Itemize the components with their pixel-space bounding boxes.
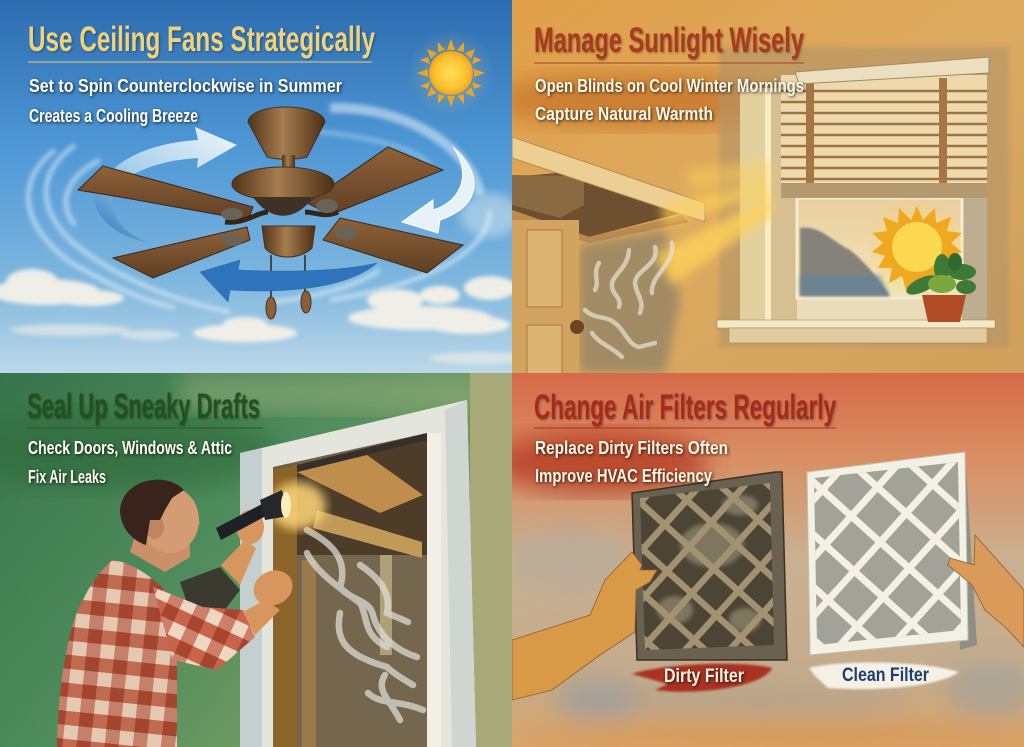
clouds bbox=[0, 269, 530, 364]
arrow: right white bbox=[402, 147, 474, 233]
text block: Check Doors, Windows & Attic bbox=[28, 438, 232, 458]
panel: air filters bbox=[490, 373, 1024, 747]
arrow: top curved bbox=[95, 127, 237, 243]
panel: ceiling fans bbox=[0, 0, 530, 373]
air wisps bbox=[585, 243, 672, 357]
door frame bbox=[240, 400, 476, 747]
label: dirty filter: Dirty Filter bbox=[664, 666, 744, 687]
label: clean filter bbox=[809, 662, 959, 689]
text block bbox=[29, 76, 342, 126]
text block bbox=[535, 438, 728, 486]
dirty filter bbox=[632, 472, 787, 660]
text block: Fix Air Leaks bbox=[28, 467, 106, 487]
text block: Capture Natural Warmth bbox=[535, 104, 713, 124]
ceiling opening bbox=[512, 137, 705, 243]
door bbox=[512, 220, 584, 385]
text block: Set to Spin Counterclockwise in Summer bbox=[29, 76, 342, 96]
sill bbox=[717, 320, 995, 343]
icon: window sun bbox=[872, 203, 964, 292]
icon: sun bbox=[413, 34, 489, 111]
heading: Manage Sunlight Wisely bbox=[534, 21, 804, 60]
arrow: blue lower bbox=[200, 260, 377, 302]
heading: Seal Up Sneaky Drafts bbox=[27, 387, 260, 426]
heading: Change Air Filters Regularly bbox=[534, 388, 836, 427]
hand left bbox=[512, 552, 657, 700]
grey wall patch bbox=[579, 230, 680, 373]
text block: Creates a Cooling Breeze bbox=[29, 106, 198, 126]
label: clean filter: Clean Filter bbox=[842, 665, 929, 686]
hand right bbox=[948, 535, 1024, 647]
swirl lines bbox=[28, 108, 490, 312]
blinds bbox=[781, 57, 989, 198]
figure: man with flashlight bbox=[57, 480, 298, 747]
plant bbox=[904, 253, 976, 322]
icon: ceiling fan bbox=[78, 107, 463, 319]
text block bbox=[28, 438, 232, 487]
heading: Use Ceiling Fans Strategically bbox=[28, 20, 375, 59]
panel: drafts bbox=[0, 373, 512, 747]
trees bbox=[800, 228, 890, 296]
label: dirty filter bbox=[632, 664, 772, 692]
window frame bbox=[740, 88, 987, 320]
text block: Replace Dirty Filters Often bbox=[535, 438, 728, 458]
sun rays bbox=[655, 160, 772, 285]
flashlight beam bbox=[270, 482, 326, 530]
text block bbox=[535, 76, 804, 124]
panel: sunlight bbox=[490, 0, 1024, 385]
air wisps bbox=[307, 530, 423, 720]
clean filter bbox=[807, 452, 977, 655]
window shadow bbox=[719, 47, 1009, 347]
text block: Open Blinds on Cool Winter Mornings bbox=[535, 76, 804, 96]
text block: Improve HVAC Efficiency bbox=[535, 466, 712, 486]
